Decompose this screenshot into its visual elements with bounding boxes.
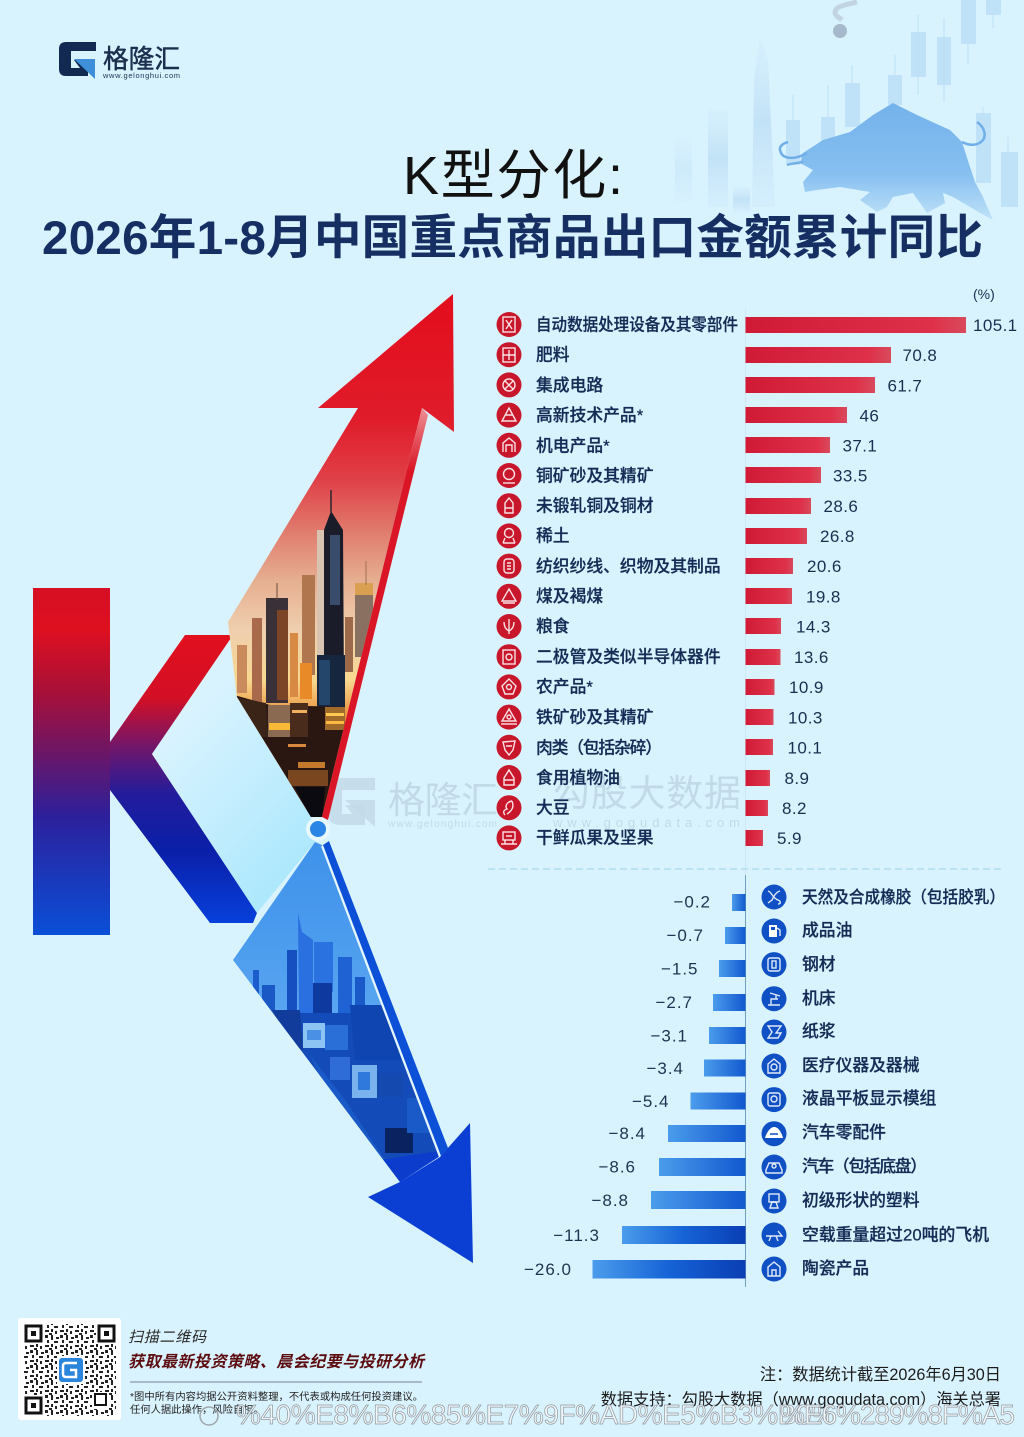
row: 纸浆: 纸浆	[802, 1022, 836, 1041]
row: 未锻轧铜及铜材	[496, 493, 858, 518]
row: 机电产品*: 机电产品*	[536, 436, 610, 456]
row: 陶瓷产品: 陶瓷产品	[802, 1259, 869, 1278]
row: 肉类（包括杂碎）	[496, 735, 822, 760]
row: 汽车（包括底盘）	[598, 1154, 927, 1180]
row: 铜矿砂及其精矿: 铜矿砂及其精矿	[536, 466, 654, 486]
disclaimer: *图中所有内容均据公开资料整理，不代表或构成任何投资建议。	[130, 1390, 423, 1403]
row: 肥料	[496, 342, 937, 367]
title: 2026年1-8月中国重点商品出口金额累计同比	[42, 212, 983, 265]
row: 粮食	[496, 614, 831, 639]
K letter	[33, 588, 315, 935]
row: 天然及合成橡胶（包括胶乳）: −0.2	[673, 892, 711, 912]
question mark	[833, 2, 857, 38]
row: 汽车零配件	[608, 1121, 886, 1146]
row: 纸浆	[650, 1020, 836, 1046]
row: 机电产品*	[496, 433, 877, 458]
weibo watermark: %40%E8%B6%85%E7%9F%AD%E5%B3%B0%	[236, 1399, 836, 1430]
row: 食用植物油: 食用植物油	[536, 768, 620, 788]
row: 煤及褐煤: 19.8	[806, 588, 841, 606]
row: 稀土: 26.8	[820, 527, 855, 546]
row: 初级形状的塑料	[591, 1188, 920, 1214]
logo	[59, 42, 180, 80]
watermark: www.gelonghui.com	[387, 819, 497, 830]
unit label: (%)	[973, 286, 995, 302]
row: 肥料: 肥料	[536, 346, 570, 364]
row: 粮食: 粮食	[536, 616, 570, 636]
row: 自动数据处理设备及其零部件	[496, 312, 1018, 337]
source note: 注：数据统计截至2026年6月30日	[760, 1366, 1001, 1384]
row: 医疗仪器及器械: 医疗仪器及器械	[802, 1056, 920, 1075]
row: 二极管及类似半导体器件	[496, 644, 829, 669]
row: 纺织纱线、织物及其制品: 20.6	[807, 557, 842, 576]
row: 煤及褐煤: 煤及褐煤	[536, 587, 603, 606]
row: 二极管及类似半导体器件: 二极管及类似半导体器件	[536, 648, 721, 666]
row: 机电产品*: 37.1	[842, 436, 877, 456]
row: 未锻轧铜及铜材: 28.6	[824, 497, 858, 516]
row: 空载重量超过20吨的飞机: −11.3	[553, 1226, 600, 1245]
row: 大豆: 8.2	[782, 799, 807, 818]
pivot circle	[306, 817, 330, 841]
source note: 数据支持：勾股大数据（www.gogudata.com）海关总署	[601, 1391, 1001, 1409]
row: 医疗仪器及器械	[646, 1054, 920, 1078]
row: 空载重量超过20吨的飞机	[553, 1222, 989, 1248]
row: 干鲜瓜果及坚果	[496, 825, 802, 850]
row: 纸浆: −3.1	[650, 1026, 688, 1046]
row: 肉类（包括杂碎）: 10.1	[788, 738, 822, 758]
row: 铜矿砂及其精矿	[496, 463, 868, 488]
row: 成品油	[666, 918, 852, 945]
CTA text: 扫描二维码	[128, 1329, 207, 1346]
row: 液晶平板显示模组: 液晶平板显示模组	[802, 1089, 936, 1108]
red up arrow with city	[220, 294, 454, 830]
row: 成品油: 成品油	[802, 921, 852, 940]
QR code	[18, 1318, 121, 1420]
row: 大豆	[496, 795, 807, 820]
CTA text	[128, 1329, 426, 1371]
row: 集成电路: 61.7	[888, 376, 922, 396]
row: 农产品*: 10.9	[789, 678, 824, 697]
logo: 格隆汇	[103, 44, 180, 74]
row: 成品油: −0.7	[666, 926, 704, 945]
watermark: www.gogudata.com	[552, 815, 740, 830]
row: 汽车零配件: 汽车零配件	[802, 1123, 886, 1142]
row: 纺织纱线、织物及其制品: 纺织纱线、织物及其制品	[536, 557, 721, 576]
disclaimer	[130, 1390, 423, 1416]
row: 大豆: 大豆	[536, 798, 570, 818]
row: 天然及合成橡胶（包括胶乳）: 天然及合成橡胶（包括胶乳）	[802, 887, 1005, 907]
row: 空载重量超过20吨的飞机: 空载重量超过20吨的飞机	[802, 1226, 989, 1244]
row: 铁矿砂及其精矿	[496, 705, 823, 730]
row: 天然及合成橡胶（包括胶乳）	[673, 884, 1005, 912]
row: 钢材	[661, 952, 836, 978]
row: 初级形状的塑料: 初级形状的塑料	[802, 1191, 920, 1210]
row: 铁矿砂及其精矿: 铁矿砂及其精矿	[536, 708, 654, 727]
row: 高新技术产品*: 高新技术产品*	[536, 406, 644, 425]
row: 机床: 机床	[802, 989, 836, 1008]
row: 汽车（包括底盘）: 汽车（包括底盘）	[802, 1157, 927, 1176]
row: 机床: −2.7	[655, 993, 693, 1012]
logo: www.gelonghui.com	[102, 71, 180, 80]
row: 二极管及类似半导体器件: 13.6	[794, 648, 829, 667]
row: 农产品*	[496, 674, 824, 699]
row: 干鲜瓜果及坚果: 5.9	[777, 829, 802, 848]
watermark: 格隆汇	[388, 780, 498, 821]
row: 自动数据处理设备及其零部件: 自动数据处理设备及其零部件	[536, 316, 738, 334]
row: 铁矿砂及其精矿: 10.3	[788, 708, 823, 728]
blue down arrow with city	[225, 840, 473, 1263]
disclaimer: 任何人据此操作，风险自担。	[130, 1403, 264, 1416]
row: 肉类（包括杂碎）: 肉类（包括杂碎）	[536, 738, 662, 758]
title	[42, 146, 983, 265]
source note	[601, 1366, 1001, 1409]
row: 陶瓷产品	[524, 1256, 869, 1282]
title: K型分化:	[403, 146, 623, 206]
row: 干鲜瓜果及坚果: 干鲜瓜果及坚果	[536, 828, 654, 848]
row: 钢材: 钢材	[802, 955, 836, 974]
row: 机床	[655, 986, 836, 1012]
background: bull and candlesticks	[675, 0, 1018, 220]
row: 未锻轧铜及铜材: 未锻轧铜及铜材	[536, 496, 654, 516]
row: 粮食: 14.3	[796, 618, 831, 636]
row: 稀土	[496, 523, 855, 548]
row: 食用植物油: 8.9	[784, 769, 809, 788]
row: 纺织纱线、织物及其制品	[496, 554, 842, 579]
row: 汽车（包括底盘）: −8.6	[598, 1158, 636, 1176]
row: 汽车零配件: −8.4	[608, 1124, 646, 1143]
row: 医疗仪器及器械: −3.4	[646, 1059, 684, 1078]
CTA text: 获取最新投资策略、晨会纪要与投研分析	[128, 1353, 426, 1371]
row: 液晶平板显示模组: −5.4	[632, 1092, 670, 1111]
row: 高新技术产品*	[496, 403, 879, 428]
panel: negative growth ranking	[524, 884, 1005, 1282]
row: 煤及褐煤	[496, 584, 841, 609]
axis and divider	[488, 308, 1003, 1287]
row: 初级形状的塑料: −8.8	[591, 1191, 629, 1210]
row: 稀土: 稀土	[536, 526, 570, 546]
row: 集成电路	[496, 372, 922, 397]
row: 食用植物油	[496, 765, 809, 790]
row: 钢材: −1.5	[661, 960, 698, 978]
row: 农产品*: 农产品*	[536, 678, 593, 696]
row: 高新技术产品*: 46	[860, 406, 879, 426]
row: 铜矿砂及其精矿: 33.5	[833, 466, 868, 486]
row: 液晶平板显示模组	[632, 1087, 936, 1112]
watermark	[328, 773, 741, 830]
weibo watermark: %E6%289%8F%A5	[780, 1399, 1015, 1430]
watermark: 勾股大数据	[553, 773, 741, 814]
row: 自动数据处理设备及其零部件: 105.1	[973, 316, 1018, 335]
row: 陶瓷产品: −26.0	[524, 1260, 572, 1279]
row: 集成电路: 集成电路	[536, 376, 603, 395]
panel: positive growth ranking	[496, 312, 1018, 850]
row: 肥料: 70.8	[902, 346, 937, 365]
